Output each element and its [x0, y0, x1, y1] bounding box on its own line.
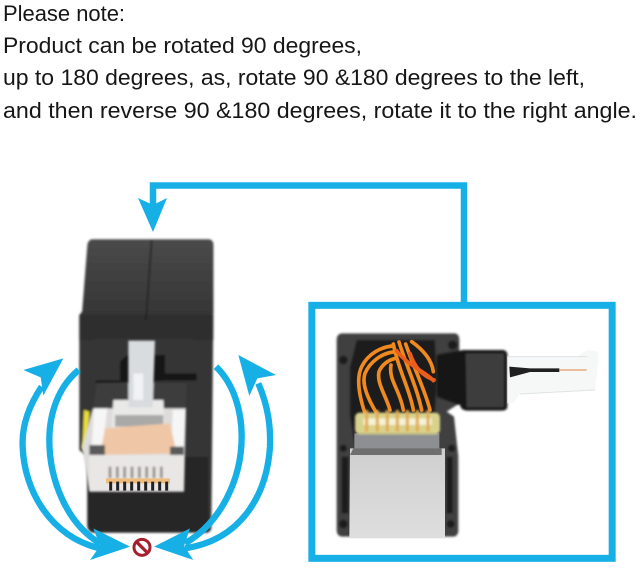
black boot: [437, 350, 507, 411]
note text: and then reverse 90 &180 degrees, rotate it to the right angle.: [3, 98, 637, 123]
note text: up to 180 degrees, as, rotate 90 &180 degrees to the left,: [3, 65, 585, 90]
metal shield: [349, 433, 445, 537]
icon: prohibited sign: [134, 539, 150, 555]
RJ45 plug side view: [507, 350, 598, 403]
RJ45 plug: [82, 341, 187, 492]
rotation arrows, left: [23, 358, 130, 560]
connector arrow from panel to product top: [138, 186, 464, 302]
product: RJ45 adapter front view: [23, 239, 276, 560]
rotation arrows, right: [154, 355, 276, 560]
note text: Product can be rotated 90 degrees,: [3, 33, 362, 58]
panel: cutaway view: [312, 305, 612, 558]
yellow strain relief: [355, 410, 440, 434]
adapter body: [79, 239, 213, 533]
panel frame: [312, 305, 612, 558]
orange wires: [359, 342, 434, 413]
note text: [3, 1, 637, 123]
note text: Please note:: [3, 1, 125, 26]
cutaway housing: [337, 333, 459, 537]
plug contacts: [106, 478, 170, 491]
